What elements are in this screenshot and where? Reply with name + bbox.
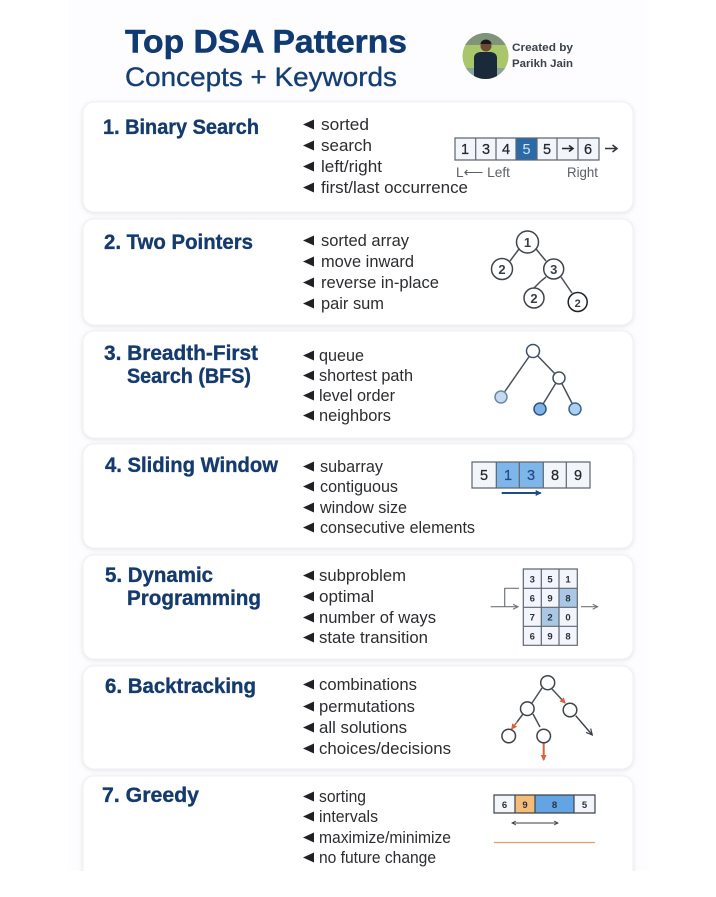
array diagram: 4 (502, 142, 510, 158)
binary tree diagram: 3 (550, 262, 557, 277)
panel: backtracking (83, 666, 633, 769)
array diagram: L⟵ Left (456, 164, 510, 180)
panel: two pointers (83, 219, 633, 325)
keywords: two pointers: sorted array (321, 232, 410, 250)
dp grid diagram: 2 (547, 612, 553, 624)
keywords: two pointers (303, 232, 439, 313)
keywords: two pointers: reverse in-place (321, 274, 439, 292)
array diagram: 5 (522, 142, 531, 158)
dp grid diagram: 0 (565, 612, 571, 624)
dp grid diagram: 7 (530, 612, 535, 624)
keywords: greedy: sorting (319, 788, 366, 806)
keywords: sliding window: consecutive elements (320, 519, 475, 537)
sliding window array: 1 (504, 468, 512, 484)
sliding window array: 3 (527, 468, 535, 484)
dp grid diagram: 6 (530, 594, 535, 604)
dp grid diagram: 8 (565, 594, 571, 604)
binary tree diagram: 2 (575, 298, 581, 310)
dp grid diagram: 3 (530, 574, 535, 586)
sliding window array (472, 462, 590, 493)
heading: backtracking: 6. Backtracking (105, 675, 256, 698)
heading: dynamic programming (105, 564, 261, 610)
bfs tree diagram (495, 344, 581, 415)
keywords: greedy: no future change (319, 849, 436, 867)
keywords: binary search (303, 116, 468, 197)
keywords: binary search: sorted (321, 116, 369, 134)
keywords: bfs: level order (319, 387, 396, 405)
keywords: sliding window (303, 458, 475, 537)
panel: sliding window (83, 444, 633, 548)
keywords: backtracking: permutations (319, 698, 415, 716)
sliding window array: 5 (480, 468, 488, 484)
keywords: binary search: search (321, 137, 372, 155)
greedy array diagram: 9 (522, 800, 528, 811)
panel: binary search (83, 102, 633, 212)
keywords: sliding window: subarray (320, 458, 384, 476)
dp grid diagram: 6 (530, 632, 535, 642)
dp grid diagram (491, 569, 598, 645)
keywords: bfs: queue (319, 347, 364, 365)
greedy array diagram (494, 795, 595, 842)
binary tree diagram (492, 231, 587, 312)
heading: dynamic programming: Programming (127, 587, 261, 610)
array diagram: 3 (482, 142, 490, 158)
heading: dynamic programming: 5. Dynamic (105, 564, 213, 587)
heading: breadth-first search: 3. Breadth-First (104, 342, 258, 365)
heading: breadth-first search (104, 342, 258, 388)
greedy array diagram: 6 (502, 800, 507, 811)
dp grid diagram: 9 (547, 632, 553, 642)
keywords: dynamic programming (303, 567, 436, 647)
binary tree diagram: 2 (498, 262, 506, 277)
dp grid diagram: 8 (565, 632, 571, 642)
author credit: Parikh Jain (512, 58, 573, 70)
keywords: backtracking (303, 676, 451, 758)
keywords: bfs (303, 347, 413, 425)
binary tree diagram: 2 (530, 291, 538, 306)
keywords: two pointers: move inward (321, 253, 414, 271)
heading: binary search: 1. Binary Search (103, 116, 259, 139)
author credit (512, 42, 574, 70)
keywords: sliding window: contiguous (320, 478, 398, 496)
keywords: dynamic programming: subproblem (319, 567, 406, 585)
backtracking tree diagram (502, 676, 592, 760)
heading: sliding window: 4. Sliding Window (105, 454, 279, 477)
array diagram: Right (567, 164, 598, 180)
greedy array diagram: 5 (582, 800, 588, 811)
keywords: dynamic programming: number of ways (319, 609, 436, 627)
dp grid diagram: 5 (547, 574, 553, 586)
dp grid diagram: 1 (565, 574, 571, 586)
subtitle: Concepts + Keywords (125, 62, 397, 92)
array diagram: 1 (461, 142, 469, 158)
keywords: binary search: first/last occurrence (321, 179, 468, 197)
keywords: bfs: neighbors (319, 407, 391, 425)
heading: breadth-first search: Search (BFS) (127, 365, 251, 388)
binary tree diagram: 1 (524, 235, 531, 250)
array diagram: 5 (543, 142, 551, 158)
array diagram: 6 (584, 142, 592, 158)
greedy array diagram: 8 (552, 800, 557, 811)
keywords: backtracking: all solutions (319, 719, 407, 737)
keywords: sliding window: window size (319, 499, 407, 517)
keywords: greedy: intervals (319, 808, 378, 826)
panel: greedy (82, 776, 634, 871)
keywords: two pointers: pair sum (321, 295, 384, 313)
heading: greedy: 7. Greedy (102, 784, 199, 807)
panel: breadth-first search (83, 331, 633, 438)
array diagram (455, 138, 617, 180)
heading: two pointers: 2. Two Pointers (104, 231, 253, 254)
author credit: Created by (512, 42, 574, 54)
keywords: greedy (303, 788, 451, 867)
keywords: backtracking: choices/decisions (319, 740, 451, 758)
sliding window array: 8 (551, 468, 559, 484)
keywords: greedy: maximize/minimize (319, 829, 451, 847)
panel: dynamic programming (83, 555, 633, 659)
title: Top DSA Patterns (125, 24, 407, 60)
keywords: dynamic programming: optimal (319, 588, 374, 606)
author avatar (462, 33, 509, 80)
keywords: backtracking: combinations (319, 676, 417, 694)
keywords: dynamic programming: state transition (319, 629, 428, 647)
keywords: bfs: shortest path (319, 367, 413, 385)
sliding window array: 9 (574, 468, 582, 484)
keywords: binary search: left/right (321, 158, 382, 176)
dp grid diagram: 9 (547, 594, 553, 604)
